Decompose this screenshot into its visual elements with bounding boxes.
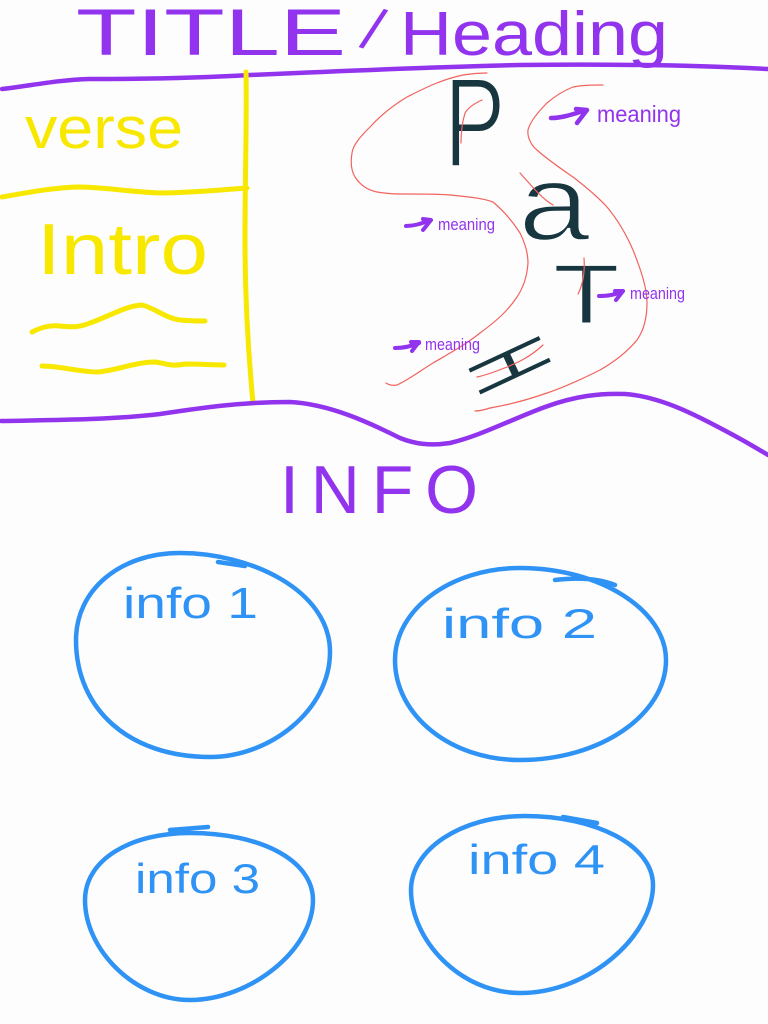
meaning callout: top right: meaning — [597, 101, 681, 127]
large letter t: T — [553, 247, 620, 341]
panel: Path river diagram — [351, 51, 685, 411]
title — [76, 0, 668, 69]
meaning callout: left — [406, 215, 495, 234]
meaning callout: right — [599, 284, 685, 303]
bubble outline — [85, 827, 313, 1000]
wavy section divider — [1, 394, 768, 455]
bubble label: info 4 — [468, 836, 605, 883]
info heading: INFO — [280, 452, 478, 528]
bubble outline — [395, 568, 666, 760]
bubble outline — [411, 816, 653, 993]
river banks — [351, 73, 647, 411]
sidebar borders — [2, 72, 253, 403]
meaning callout: top right — [551, 101, 681, 127]
large letter a: a — [518, 143, 591, 264]
large letter P: P — [444, 51, 505, 195]
panel: info 2 — [395, 568, 666, 760]
bubble label: info 3 — [135, 855, 260, 902]
bubble outline — [76, 553, 330, 757]
intro label: Intro — [37, 210, 208, 290]
meaning callout: left: meaning — [438, 215, 495, 234]
bubble label: info 1 — [123, 579, 258, 628]
panel: info 4 — [411, 816, 653, 993]
letter guide strokes — [461, 100, 584, 377]
meaning callout: bottom left: meaning — [425, 335, 480, 354]
title: Heading — [400, 0, 668, 69]
meaning callout: right: meaning — [630, 284, 685, 303]
verse label: verse — [25, 96, 183, 161]
meaning callout: bottom left — [395, 335, 480, 354]
intro text lines — [32, 305, 224, 372]
panel: verse and intro sidebar — [2, 72, 253, 403]
panel: info 3 — [85, 827, 313, 1000]
header divider line — [2, 65, 768, 89]
panel: info 1 — [76, 553, 330, 757]
large letter H: H — [444, 321, 576, 409]
bubble label: info 2 — [442, 600, 597, 647]
